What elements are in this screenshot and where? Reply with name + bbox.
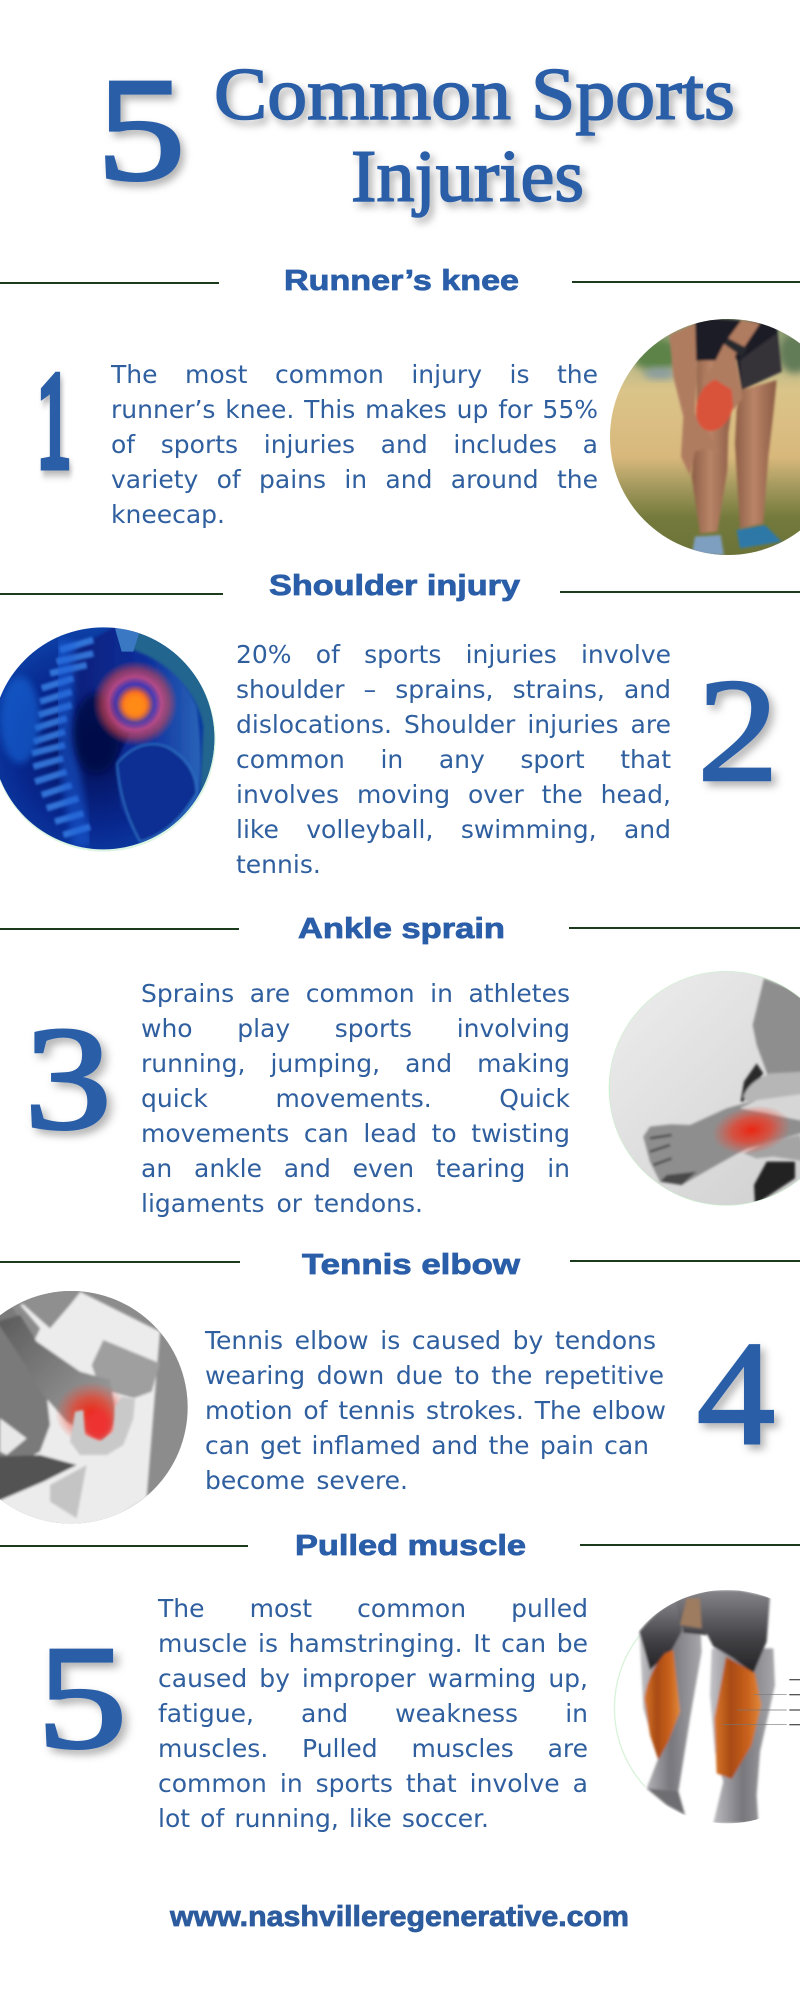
text: runner's knee: kneecap. [111,500,225,529]
text: pulled muscle: muscle is hamstringing. It can be [158,1629,588,1658]
text: runner's knee: runner’s knee. This makes up for 55% [111,395,598,424]
green rim [0,628,216,852]
title line 2: Injuries [351,136,584,218]
text: ankle sprain: quick movements. Quick [141,1084,570,1113]
heading: Runner's knee: Runner’s knee [284,265,519,297]
title [97,48,735,218]
right leg [735,380,777,528]
pain glow [56,1384,121,1440]
text: ankle sprain: ligaments or tendons. [141,1189,423,1218]
text: shoulder injury: common in any sport that [236,745,671,774]
muscle label lines [723,1695,787,1725]
number 3: 3 [24,997,112,1161]
left leg [638,1625,703,1794]
green arc [614,1635,645,1787]
dark shorts [741,1063,763,1102]
text: ankle sprain [141,979,570,1218]
hand [743,1072,800,1102]
knee and thigh [753,978,800,1085]
text: runner's knee: of sports injuries and includes a [111,430,598,459]
photo: runner holding knee [610,319,800,555]
number 5: 5 [37,1615,127,1779]
text: shoulder injury: dislocations. Shoulder injuries are [236,710,671,739]
photo: shoulder anatomy [0,620,227,853]
text: tennis elbow [204,1326,666,1495]
text: tennis elbow: wearing down due to the repetitive [205,1361,664,1390]
number 4: 4 [697,1311,775,1475]
text: tennis elbow: can get inflamed and the pain can [205,1431,649,1460]
text: tennis elbow: Tennis elbow is caused by tendons [205,1326,656,1355]
text: pulled muscle: lot of running, like soccer. [158,1804,489,1833]
title number 5: 5 [97,48,185,212]
title line 1: Common Sports [214,54,735,136]
text: tennis elbow: motion of tennis strokes. The elbow [205,1396,666,1425]
body [67,627,200,843]
left arm and hand [668,324,703,475]
text: pulled muscle [158,1594,588,1833]
right leg [710,1648,775,1823]
text: ankle sprain: who play sports involving [141,1014,570,1043]
heading: Tennis elbow: Tennis elbow [302,1249,521,1281]
left leg [692,360,733,533]
text: pulled muscle: caused by improper warming up, [158,1664,588,1693]
text: shoulder injury: tennis. [236,850,321,879]
text: pulled muscle: muscles. Pulled muscles are [158,1734,588,1763]
text: ankle sprain: Sprains are common in athletes [141,979,570,1008]
text: ankle sprain: running, jumping, and making [141,1049,570,1078]
text: shoulder injury: like volleyball, swimming, and [236,815,671,844]
left hamstring [644,1650,680,1760]
glutes [639,1598,682,1670]
text: shoulder injury [236,640,671,879]
hand [70,1397,135,1455]
photo: hamstring muscles [614,1590,800,1823]
forearm [0,1315,117,1442]
heading: Pulled muscle: Pulled muscle [295,1530,526,1562]
upper arm [92,1340,160,1398]
knee pain [694,379,734,432]
supporting hand [744,1135,800,1162]
text: ankle sprain: an ankle and even tearing in [141,1154,570,1183]
heading: Ankle sprain: Ankle sprain [298,913,505,945]
text: pulled muscle: fatigue, and weakness in [158,1699,588,1728]
leg and foot [643,1093,800,1185]
text: pulled muscle: common in sports that involve a [158,1769,588,1798]
pain glow [714,1106,789,1154]
text: pulled muscle: The most common pulled [158,1594,588,1623]
text: shoulder injury: 20% of sports injuries involve [236,640,671,669]
upper hand [714,320,762,410]
right hamstring [714,1657,761,1779]
neck [20,1288,83,1328]
text: shoulder injury: involves moving over the head, [236,780,671,809]
t-shirt [0,1292,160,1528]
text: runner's knee: variety of pains in and around the [111,465,598,494]
number 1: 1 [37,346,71,496]
photo: ankle [609,968,800,1212]
spine [32,640,93,835]
photo: elbow [0,1288,193,1528]
torso shadow [0,1308,52,1459]
text: shoulder injury: shoulder – sprains, strains, and [236,675,671,704]
text: ankle sprain: movements can lead to twisting [141,1119,570,1148]
watch [723,338,747,357]
text: runner's knee: The most common injury is the [111,360,598,389]
text: tennis elbow: become severe. [205,1466,408,1495]
green rim [609,971,800,1206]
text: runner's knee [110,360,598,529]
shoes [692,535,724,555]
heading: Shoulder injury: Shoulder injury [269,570,520,602]
pain rings [92,661,178,746]
shorts [695,317,782,390]
footer url: www.nashvilleregenerative.com [169,1901,629,1933]
number 2: 2 [697,648,779,812]
other forearm [0,1455,77,1505]
tiny labels [789,1679,800,1725]
